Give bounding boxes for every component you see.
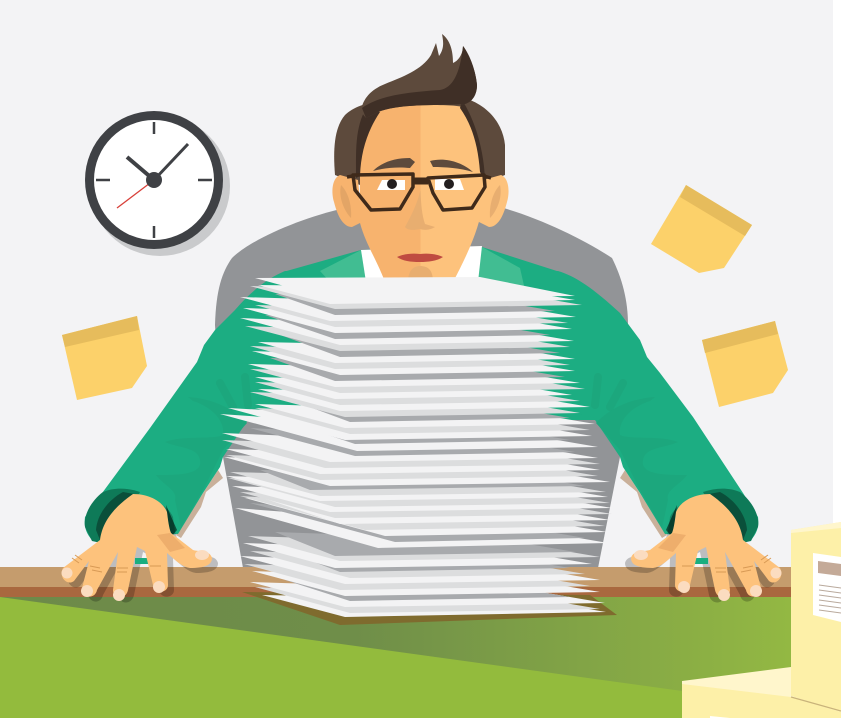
hair back (334, 100, 505, 185)
icon: sticky note left (62, 316, 147, 400)
shirt and collar (320, 246, 525, 290)
green desk surface (0, 597, 791, 718)
box stack: upper box (791, 522, 841, 712)
man torso (245, 247, 600, 420)
right arm (513, 271, 758, 545)
face (360, 105, 420, 282)
hair dark side strands (356, 110, 380, 178)
right hand (625, 494, 782, 602)
icon: sticky note right (702, 321, 788, 407)
right page margin (833, 0, 841, 522)
eyebrows (373, 158, 415, 171)
paper stack (220, 277, 612, 617)
chin shadow (408, 266, 433, 282)
desk edge (0, 587, 791, 597)
desk shadow (0, 597, 791, 691)
nose (405, 190, 435, 230)
eyes (377, 180, 405, 190)
box stack: lower box (682, 667, 841, 718)
ears (332, 175, 362, 227)
shipping label (813, 553, 841, 622)
quiff (361, 34, 477, 118)
desk top (0, 567, 791, 588)
left arm (85, 271, 330, 545)
left hand (62, 494, 218, 602)
glasses (347, 174, 491, 210)
icon: sticky note top right (651, 185, 752, 273)
man head (332, 34, 509, 282)
icon: wall clock (85, 111, 230, 256)
office chair (215, 207, 628, 568)
mouth (397, 254, 443, 262)
paper stack shadow (242, 592, 617, 625)
